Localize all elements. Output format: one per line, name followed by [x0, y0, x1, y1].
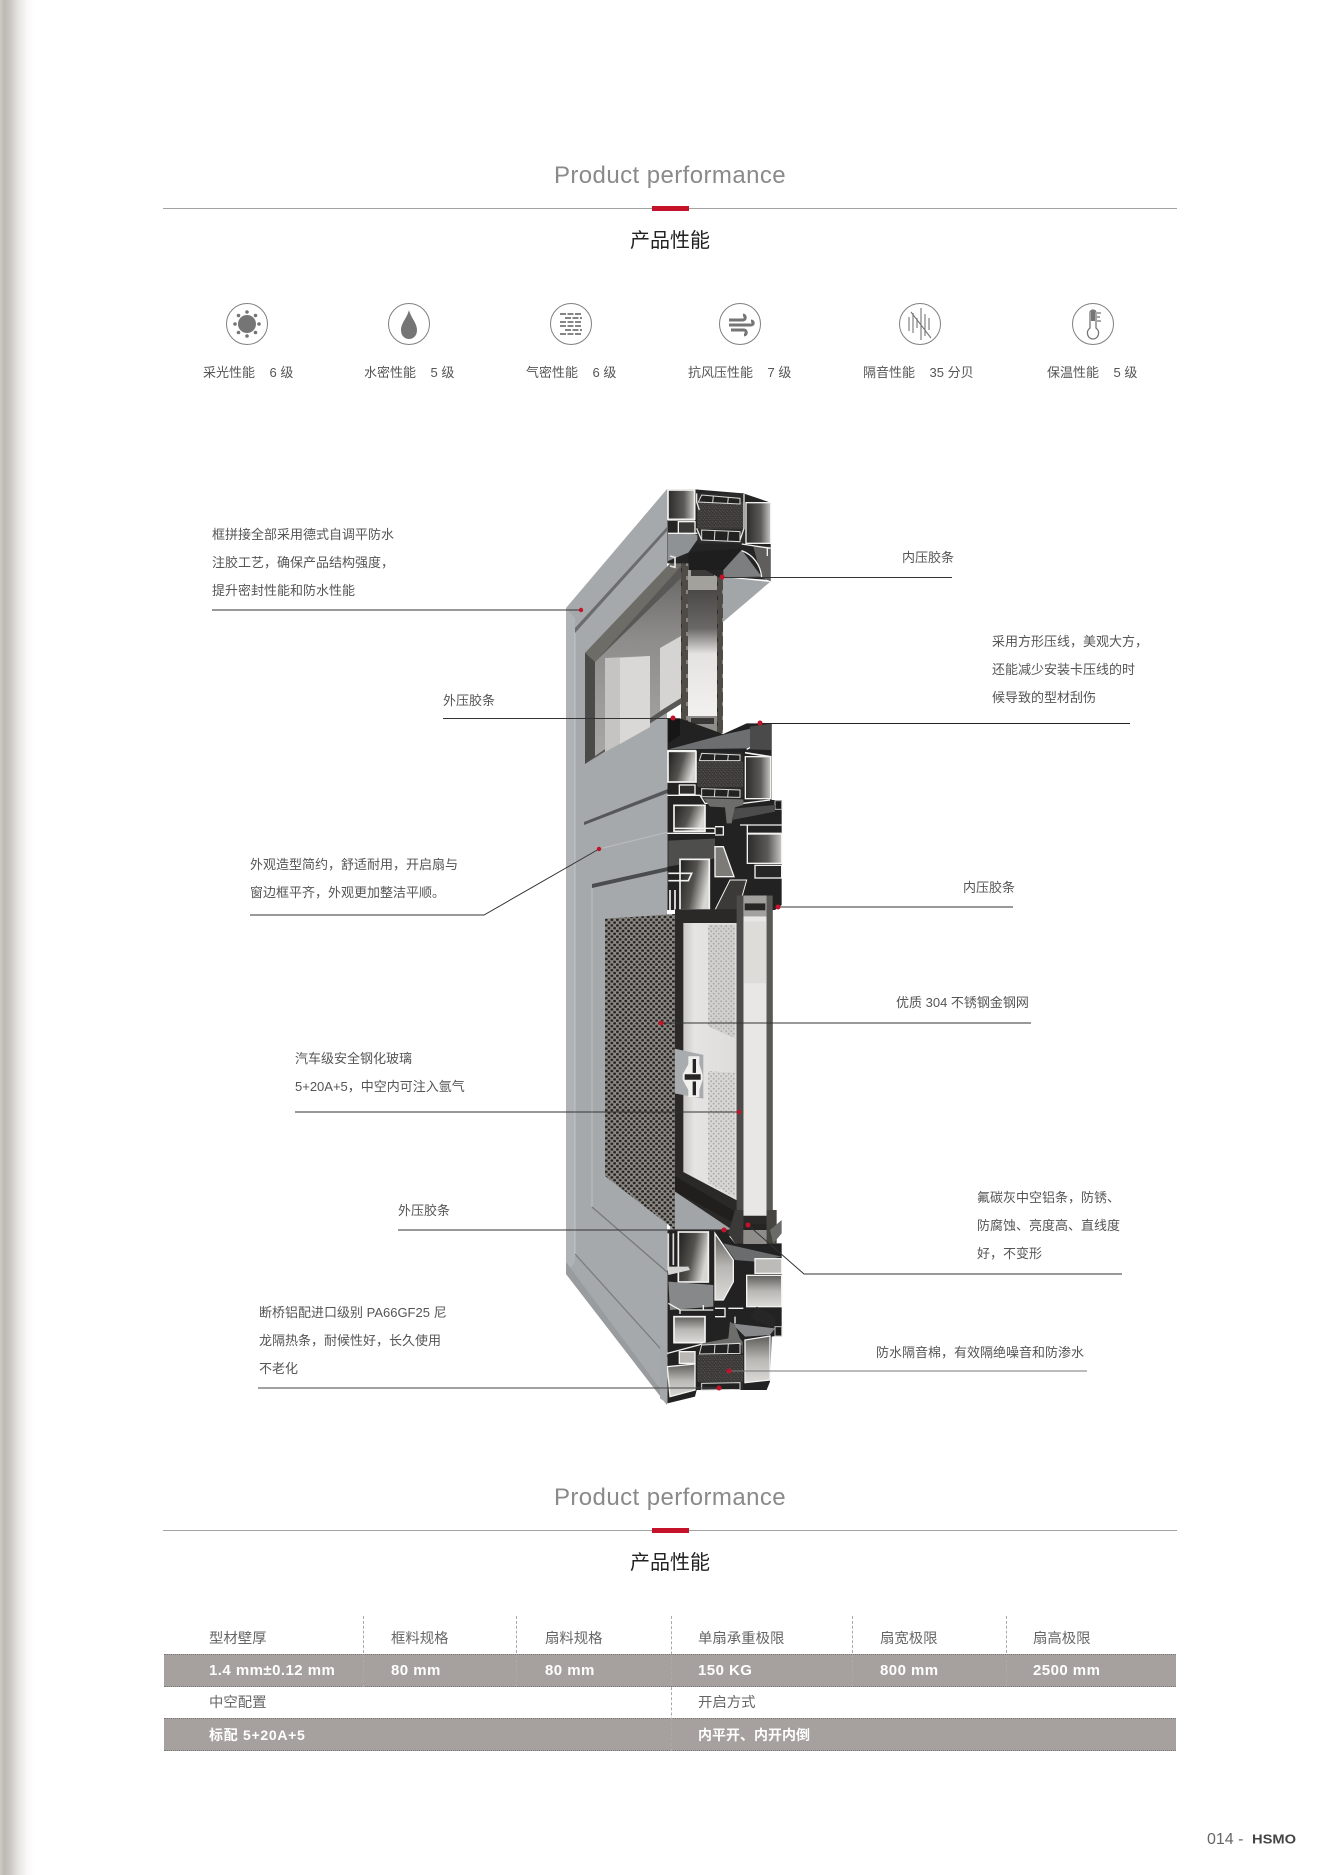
leader: lower outer gasket: [398, 1228, 726, 1232]
value: sash: 80 mm: [545, 1662, 595, 1679]
heading: lower english title: Product performance: [554, 1484, 786, 1511]
callout: glass: [295, 1051, 465, 1094]
callout: square bead: 候导致的型材刮伤: [992, 690, 1096, 705]
page edge shadow: [0, 0, 34, 1875]
callout: thermal break: 不老化: [259, 1361, 298, 1376]
bottom frame profile section: [660, 1210, 782, 1403]
callout: aluminium spacer: 好，不变形: [977, 1246, 1042, 1261]
label: air tightness: 气密性能 6 级: [526, 365, 616, 380]
callout: frame joints: 框拼接全部采用德式自调平防水: [212, 527, 394, 542]
leader: thermal break: [258, 1386, 722, 1390]
heading: lower chinese title: 产品性能: [630, 1552, 710, 1574]
red accent lower: [652, 1528, 689, 1533]
leader: aluminium spacer: [746, 1222, 1122, 1274]
callout: lower inner gasket: 内压胶条: [963, 880, 1015, 895]
value: load: 150 KG: [698, 1662, 752, 1679]
value: height: 2500 mm: [1033, 1662, 1100, 1679]
page number: 014 -: [1207, 1831, 1243, 1848]
callout: thermal break: 断桥铝配进口级别 PA66GF25 尼: [259, 1305, 447, 1320]
callout: stainless mesh: 优质 304 不锈钢金钢网: [896, 995, 1029, 1010]
callout: square bead: 还能减少安装卡压线的时: [992, 662, 1135, 677]
label: water tightness: 水密性能 5 级: [364, 365, 454, 380]
callout: aluminium spacer: 防腐蚀、亮度高、直线度: [977, 1218, 1120, 1233]
upper glass opening: [585, 552, 681, 764]
callout: square bead: 采用方形压线，美观大方，: [992, 634, 1148, 649]
callout: lower outer gasket: 外压胶条: [398, 1203, 450, 1218]
heading: top english title: Product performance: [554, 162, 786, 189]
callout: aluminium spacer: [977, 1190, 1120, 1261]
brand logo: HSMO: [1252, 1832, 1296, 1847]
header: frame: 框料规格: [391, 1631, 449, 1647]
icon: sun: [226, 304, 268, 344]
table band row 2: [164, 1718, 1176, 1751]
icon: water drop: [388, 304, 430, 344]
red accent top: [652, 206, 689, 211]
middle frame and sash profile section: [667, 718, 782, 910]
icon: thermometer: [1072, 304, 1114, 344]
value: width: 800 mm: [880, 1662, 939, 1679]
leader: stainless mesh: [658, 1020, 1031, 1026]
callout: square bead: [992, 634, 1148, 705]
heading: top chinese title: 产品性能: [630, 230, 710, 252]
label: wind pressure: 抗风压性能 7 级: [688, 365, 791, 380]
icon: wind: [720, 304, 760, 344]
leader: flush sash: [250, 847, 601, 915]
column divider 2: [516, 1616, 517, 1687]
callout: insulation foam: 防水隔音棉，有效隔绝噪音和防渗水: [876, 1345, 1084, 1360]
callout: flush appearance: 窗边框平齐，外观更加整洁平顺。: [250, 885, 445, 900]
column divider 5: [1006, 1616, 1007, 1687]
callout: flush appearance: [250, 857, 458, 900]
header: load: 单扇承重极限: [698, 1631, 784, 1647]
heading rule top: [163, 208, 1177, 209]
header: height: 扇高极限: [1033, 1631, 1091, 1647]
upper double glazing: [681, 553, 770, 733]
callout: thermal break: 龙隔热条，耐候性好，长久使用: [259, 1333, 441, 1348]
callout: frame joints: 提升密封性能和防水性能: [212, 583, 355, 598]
callout: flush appearance: 外观造型简约，舒适耐用，开启扇与: [250, 857, 458, 872]
table band row 1: [164, 1654, 1176, 1687]
mesh texture: [605, 914, 675, 1230]
callout: glass: 汽车级安全钢化玻璃: [295, 1051, 412, 1066]
callout: upper outer gasket: 外压胶条: [443, 693, 495, 708]
column divider 1: [363, 1616, 364, 1687]
column divider 3: [671, 1616, 672, 1751]
value: wall thickness: 1.4 mm±0.12 mm: [209, 1662, 335, 1679]
leader: square bead: [758, 720, 1130, 726]
leader: tempered glass: [295, 1110, 741, 1114]
header: width: 扇宽极限: [880, 1631, 938, 1647]
callout: frame joints: [212, 527, 394, 598]
leader: insulation foam: [726, 1368, 1087, 1374]
value: opening: 内平开、内开内倒: [698, 1727, 810, 1743]
icon: sound insulation: [900, 304, 940, 344]
column divider 4: [852, 1616, 853, 1687]
leader: lower inner gasket: [776, 904, 1013, 910]
callout: frame joints: 注胶工艺，确保产品结构强度，: [212, 555, 394, 570]
header: opening: 开启方式: [698, 1695, 756, 1711]
callout: thermal break: [259, 1305, 447, 1376]
value: glazing: 标配 5+20A+5: [209, 1727, 306, 1743]
label: thermal insulation: 保温性能 5 级: [1047, 365, 1137, 380]
label: sound insulation: 隔音性能 35 分贝: [863, 365, 974, 380]
top frame profile section: [667, 489, 771, 581]
value: frame: 80 mm: [391, 1662, 441, 1679]
specification table: [164, 1616, 1176, 1751]
lower glass perforation reflection: [708, 925, 735, 1197]
header: sash: 扇料规格: [545, 1631, 603, 1647]
callout: glass: 5+20A+5，中空内可注入氩气: [295, 1079, 465, 1094]
leader: upper outer gasket: [443, 716, 676, 720]
header: wall thickness: 型材壁厚: [209, 1631, 267, 1647]
callout: aluminium spacer: 氟碳灰中空铝条，防锈、: [977, 1190, 1120, 1205]
leader: frame face: [212, 608, 583, 612]
leader: upper inner gasket: [720, 574, 952, 580]
heading rule lower: [163, 1530, 1177, 1531]
icon: air tightness: [550, 304, 592, 344]
window frame face: [566, 489, 673, 1405]
icon row: [226, 303, 1114, 345]
callout: upper inner gasket: 内压胶条: [902, 550, 954, 565]
header: glazing: 中空配置: [209, 1695, 267, 1711]
insect mesh and lower glass: [605, 895, 773, 1247]
label: daylight: 采光性能 6 级: [203, 365, 293, 380]
